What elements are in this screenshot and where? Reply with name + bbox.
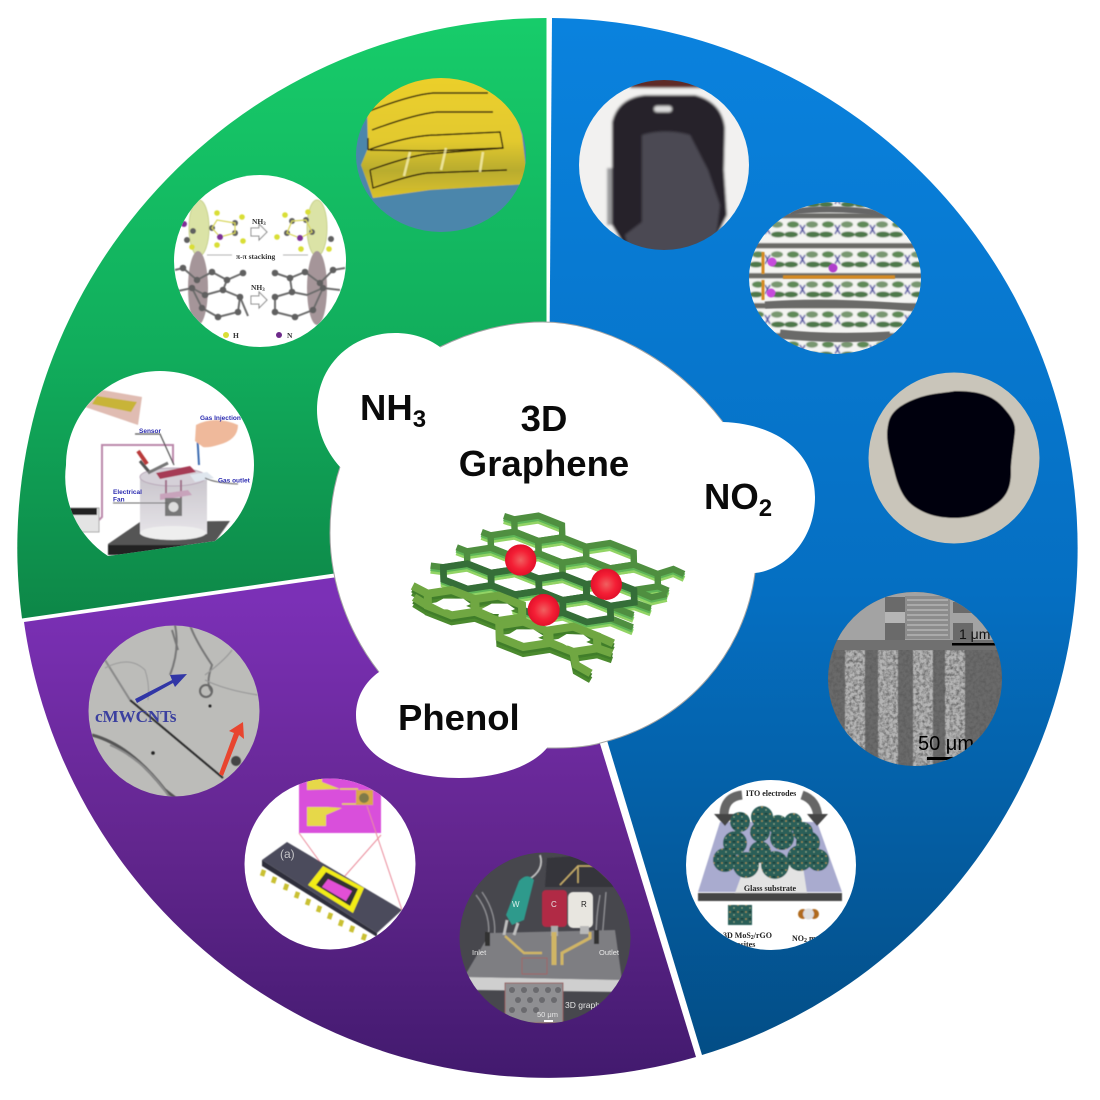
diagram: gas test chamber: Gas outlet (218, 478, 251, 484)
diagram: ITO electrodes with glass substrate: NO (792, 934, 804, 943)
label: Phenol: Phenol (398, 697, 520, 738)
diagram: ITO electrodes with glass substrate: Glass substrate (744, 884, 797, 893)
photo: flexible gold sensor film (356, 78, 526, 232)
photo: SEM electrodes (825, 590, 1005, 770)
diagram: NH3 pi-pi stacking: 3 (263, 222, 266, 227)
panel: Phenol purple sector (24, 548, 696, 1078)
photo: microfluidic device: R (581, 900, 587, 909)
photo: microfluidic device: 3D graphene (565, 1000, 614, 1010)
panel: NH3 green sector (17, 18, 546, 618)
panel: NO2 blue sector (548, 18, 1078, 1055)
label: NH3: 3 (413, 406, 426, 433)
diagram: gas test chamber: Gas Injection (200, 415, 241, 422)
diagram: gas test chamber: Fan (113, 496, 125, 504)
diagram: NH3 pi-pi stacking: 3 (262, 288, 265, 293)
diagram: sensor chip: (a) (280, 847, 295, 861)
diagram: NH3 pi-pi stacking: N (287, 331, 293, 340)
label: NO2: NO (704, 476, 759, 517)
photo: SEM electrodes: 1 μm (959, 626, 990, 642)
photo: TEM of cMWCNTs (85, 622, 265, 802)
diagram: gas test chamber (65, 371, 254, 556)
central white cloud (317, 322, 815, 778)
diagram: ITO electrodes with glass substrate: composites (718, 940, 755, 949)
diagram: NH3 pi-pi stacking: NH (251, 283, 262, 292)
diagram: NH3 pi-pi stacking: H (233, 331, 239, 340)
diagram: ITO electrodes with glass substrate: ITO electrodes (746, 789, 796, 798)
diagram: ITO electrodes with glass substrate: 3D MoS (723, 931, 751, 940)
photo: microfluidic device: C (551, 900, 557, 909)
diagram: NH3 pi-pi stacking (174, 175, 346, 347)
diagram: NH3 pi-pi stacking: π-π stacking (236, 252, 276, 261)
diagram: layered framework structure (745, 198, 925, 358)
photo: microfluidic device: Outlet (599, 948, 620, 957)
label: NH3: NH (360, 387, 413, 428)
photo: microfluidic device (455, 850, 635, 1030)
photo: microfluidic device: W (512, 900, 520, 909)
heading: 3D Graphene (459, 398, 629, 484)
photo: graphene aerogel in vial (579, 80, 749, 250)
diagram: ITO electrodes with glass substrate (686, 780, 856, 950)
diagram: ITO electrodes with glass substrate: molecule (807, 934, 840, 943)
diagram: ITO electrodes with glass substrate: 2 (751, 935, 754, 941)
heading: 3D Graphene: 3D (521, 398, 567, 439)
diagram: ITO electrodes with glass substrate: /rGO (753, 931, 772, 940)
photo: microfluidic device: Inlet (472, 948, 487, 957)
photo: TEM of cMWCNTs: cMWCNTs (95, 707, 177, 726)
icon: graphene lattice with red molecules (413, 516, 684, 680)
heading: 3D Graphene: Graphene (459, 443, 629, 484)
diagram: NH3 pi-pi stacking: NH (252, 217, 263, 226)
diagram: gas test chamber: Electrical (113, 489, 142, 496)
diagram: ITO electrodes with glass substrate: 2 (804, 938, 807, 944)
photo: microfluidic device: 50 μm (537, 1010, 558, 1019)
photo: SEM electrodes: 50 μm (918, 733, 974, 755)
diagram: gas test chamber: Sensor (139, 428, 162, 435)
photo: black graphene foam (865, 370, 1045, 550)
diagram: sensor chip (244, 776, 416, 950)
label: NO2: 2 (759, 495, 772, 522)
